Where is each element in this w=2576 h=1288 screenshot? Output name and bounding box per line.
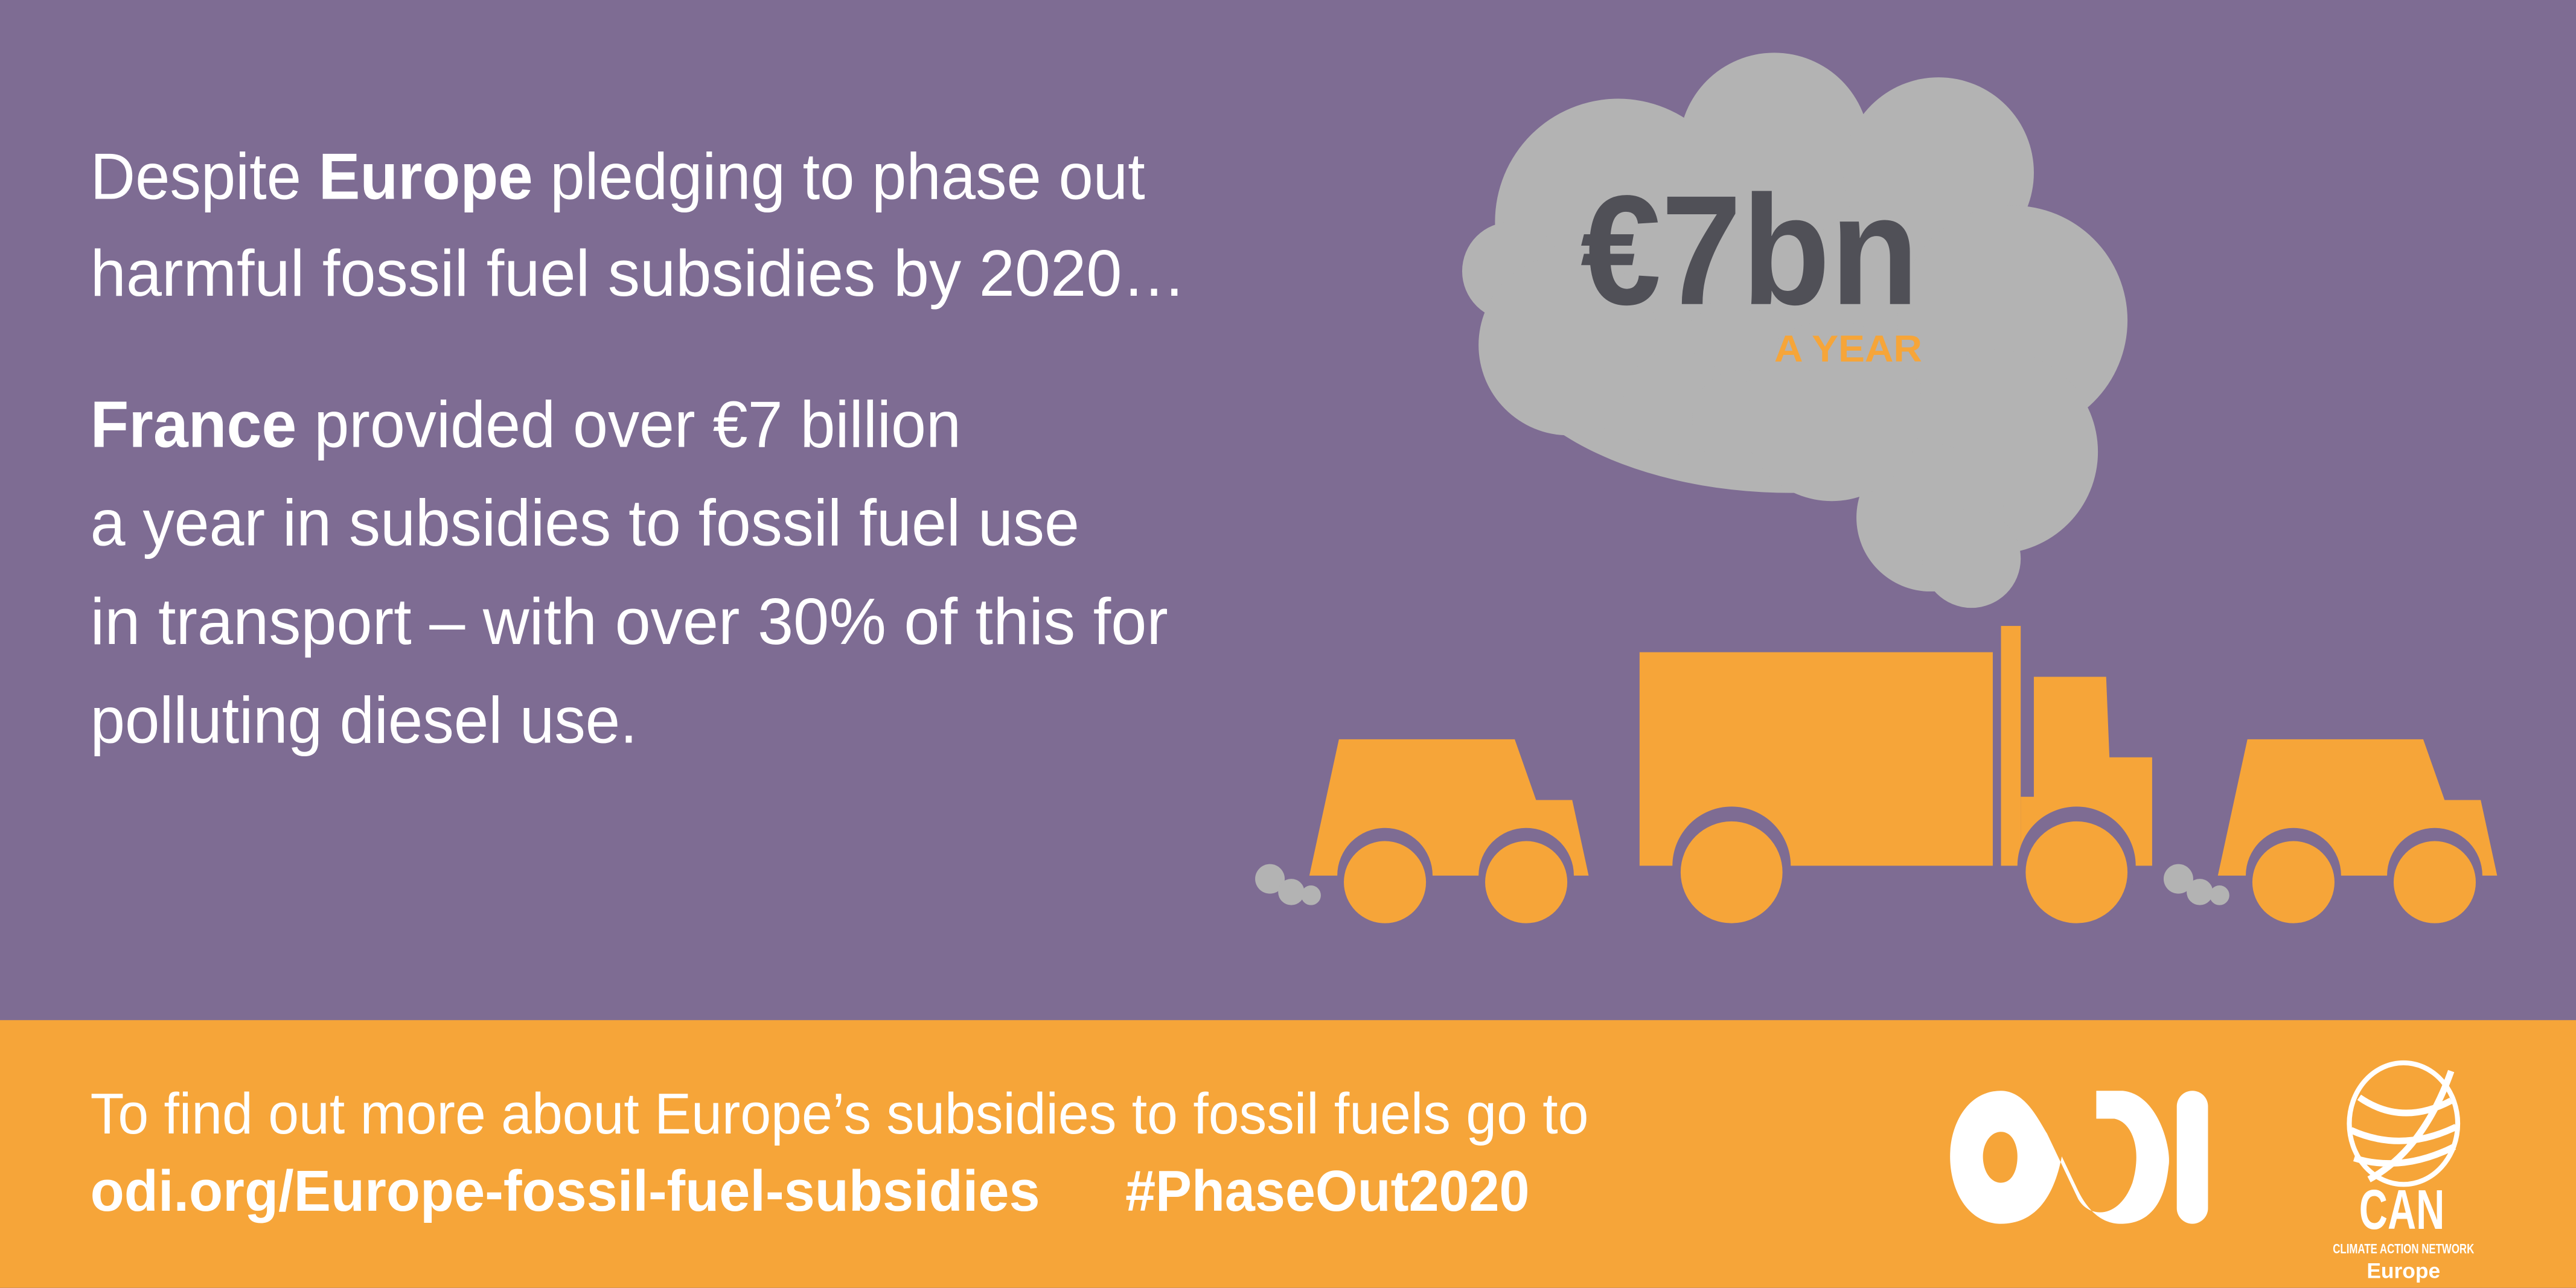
logo: CAN Europe: Europe <box>2367 1259 2440 1283</box>
vehicles <box>1255 626 2497 925</box>
main text block <box>91 140 1186 757</box>
truck <box>1640 626 2152 925</box>
footer text <box>91 1082 1588 1223</box>
car right <box>2164 739 2497 923</box>
car left <box>1255 739 1588 923</box>
main text block: in transport – with over 30% of this for <box>91 585 1168 658</box>
logo: CAN Europe <box>2333 1063 2474 1283</box>
cloud with €7bn: A YEAR <box>1774 328 1922 370</box>
main text block: Despite Europe pledging to phase out <box>91 140 1145 214</box>
footer text: To find out more about Europe’s subsidies to fossil fuels go to <box>91 1082 1588 1146</box>
footer band <box>0 1020 2576 1288</box>
cloud with €7bn <box>1462 53 2127 608</box>
footer text: odi.org/Europe-fossil-fuel-subsidies <box>91 1159 1040 1223</box>
main text block: harmful fossil fuel subsidies by 2020… <box>91 237 1186 310</box>
logo: CAN Europe: CAN <box>2359 1178 2444 1241</box>
logo: CAN Europe: CLIMATE ACTION NETWORK <box>2333 1242 2474 1257</box>
main text block: France provided over €7 billion <box>91 387 961 461</box>
footer text: #PhaseOut2020 <box>1125 1159 1530 1223</box>
amount: €7bn <box>1580 163 1919 337</box>
main text block: polluting diesel use. <box>91 683 638 757</box>
logo: ODI <box>1950 1091 2208 1224</box>
main text block: a year in subsidies to fossil fuel use <box>91 486 1079 560</box>
